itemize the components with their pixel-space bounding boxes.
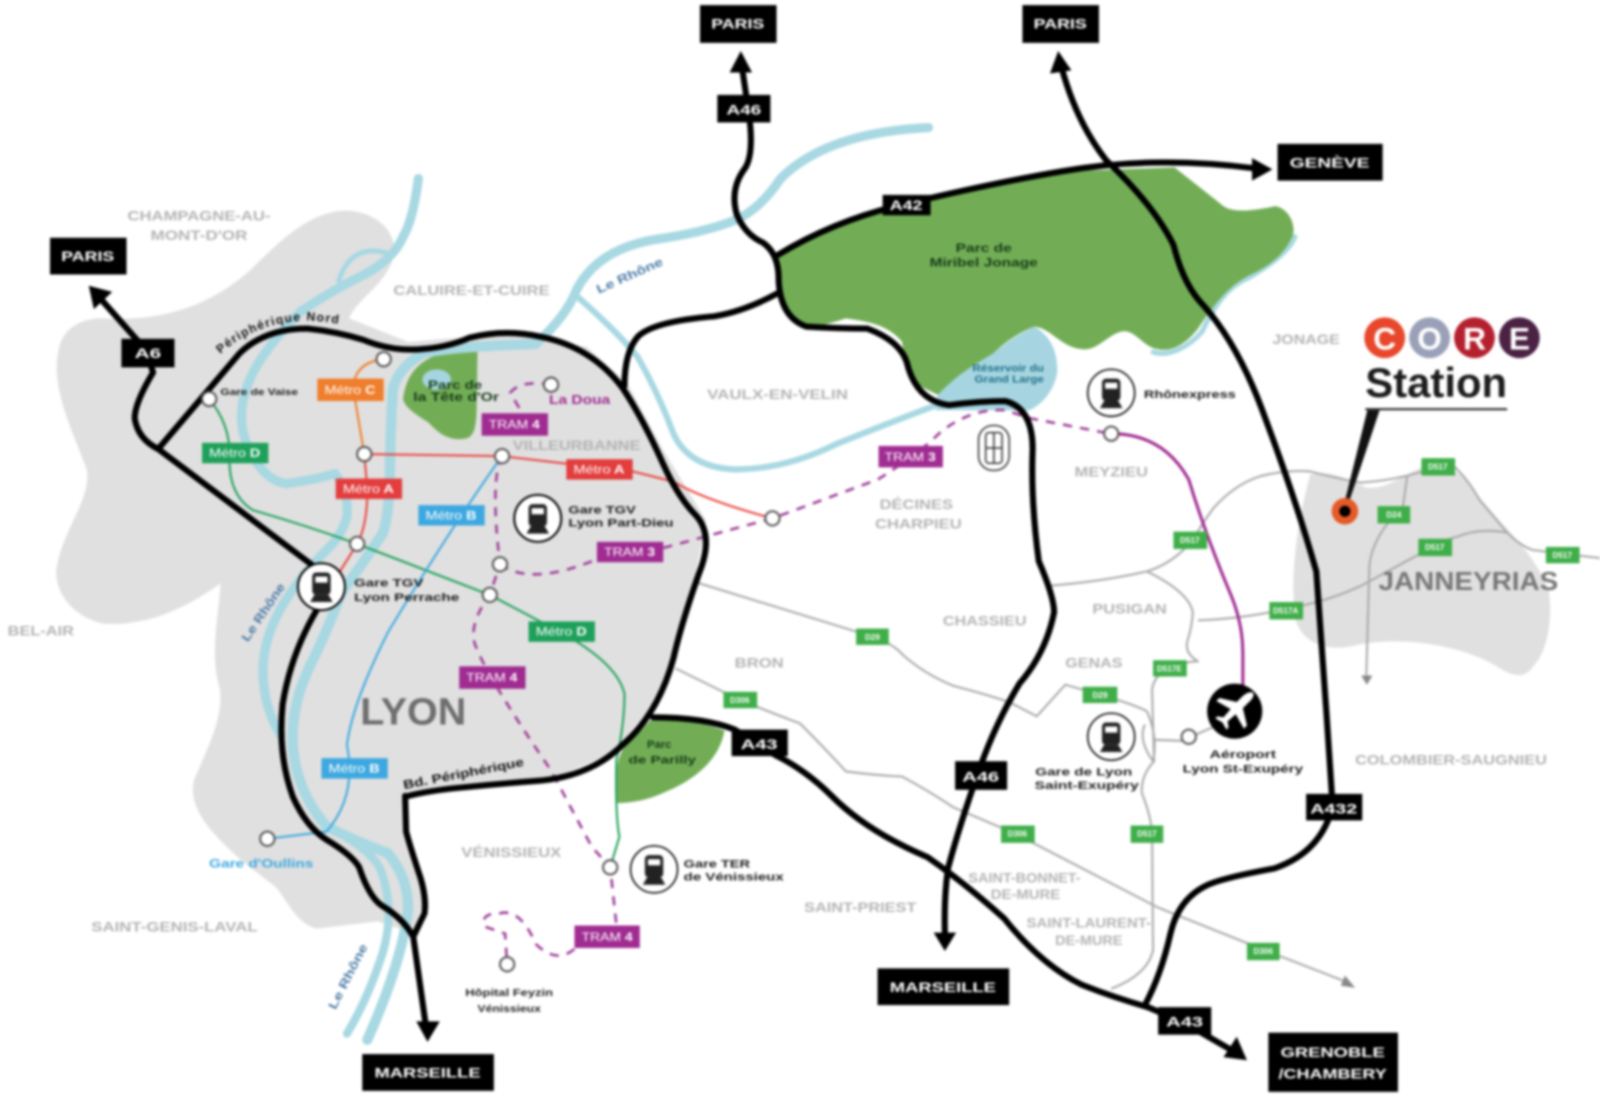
tag D517E: D517E bbox=[1157, 664, 1182, 673]
label: Métro D east bbox=[529, 621, 595, 642]
tag D306 east bbox=[1247, 943, 1280, 960]
road name: Périphérique Nord: Périphérique Nord bbox=[214, 310, 340, 355]
logo badge O: O bbox=[1417, 320, 1442, 356]
label: Métro C bbox=[317, 379, 384, 401]
label: Métro A west bbox=[336, 479, 402, 499]
sign: A46 north: A46 bbox=[727, 102, 761, 118]
stop: Métro A terminus bbox=[765, 511, 780, 526]
secondary roads bbox=[676, 466, 1600, 989]
stop: Métro A and C bbox=[357, 447, 371, 461]
sign: Paris north bbox=[700, 5, 777, 43]
tag D517A bbox=[1269, 602, 1303, 619]
label: Tram 4 south bbox=[574, 926, 640, 948]
stop: Hôpital Feyzin bbox=[500, 957, 514, 971]
label: Métro B south bbox=[321, 758, 388, 779]
sign: A432: A432 bbox=[1310, 801, 1357, 817]
river: upper Rhône bbox=[536, 128, 929, 344]
town: Meyzieu: MEYZIEU bbox=[1074, 465, 1148, 481]
place: Gare TER Vénissieux: de Vénissieux bbox=[684, 872, 785, 884]
town: Colombier-Saugnieu: COLOMBIER-SAUGNIEU bbox=[1355, 752, 1547, 768]
logo badge R bbox=[1454, 317, 1495, 358]
place: Réservoir du Grand Large: Grand Large bbox=[974, 375, 1045, 386]
town: Chassieu: CHASSIEU bbox=[943, 614, 1027, 630]
road D306 bbox=[676, 668, 1351, 984]
sign: A46 south bbox=[955, 761, 1007, 790]
tram 4 line south bbox=[484, 913, 574, 964]
place: Parc de Parilly bbox=[629, 739, 697, 766]
label: Tram 3 east bbox=[879, 446, 943, 467]
logo word Station: Station bbox=[1365, 359, 1507, 406]
town: Charpieu: CHARPIEU bbox=[875, 517, 962, 533]
sign: Marseille centre bbox=[878, 968, 1009, 1005]
place: Parc de Miribel Jonage: Parc de bbox=[956, 242, 1012, 255]
road D29 bbox=[694, 582, 1147, 716]
tag D517A right: D517 bbox=[1425, 543, 1445, 552]
label: Tram 4 north bbox=[482, 413, 548, 436]
motorway number signs bbox=[121, 95, 1362, 1035]
road D517A bbox=[1198, 531, 1507, 620]
sign: Genève bbox=[1278, 144, 1383, 181]
town: De-Mure: DE-MURE bbox=[991, 887, 1060, 903]
tag D29 Genas bbox=[1083, 687, 1117, 703]
place: Parc de la Tête d'Or: la Tête d'Or bbox=[413, 391, 500, 404]
metro B line bbox=[267, 456, 502, 839]
park: Miribel Jonage bbox=[778, 167, 1295, 395]
label: Tram 4 centre: TRAM 4 bbox=[466, 671, 518, 685]
stops bbox=[202, 352, 1196, 971]
tag D517A: D517A bbox=[1273, 606, 1299, 615]
road arrow head south bbox=[1361, 676, 1372, 685]
place: Gare TGV Perrache: Lyon Perrache bbox=[354, 592, 459, 604]
label: Tram 3 east: TRAM 3 bbox=[885, 450, 936, 464]
sign: A43 west: A43 bbox=[741, 737, 778, 753]
label: Tram 3 centre bbox=[597, 542, 663, 562]
metro C line bbox=[353, 359, 384, 454]
tram lines bbox=[473, 383, 1243, 964]
tag D306 Bron bbox=[723, 692, 757, 708]
place: Aéroport Lyon Saint-Exupéry: Lyon St-Exupéry bbox=[1183, 763, 1304, 775]
tram 3 line east bbox=[663, 410, 1110, 548]
tag D517 top: D517 bbox=[1428, 462, 1448, 471]
place: Gare TER Vénissieux: Gare TER bbox=[684, 858, 750, 870]
place: Hôpital Feyzin: Hôpital Feyzin bbox=[465, 988, 553, 999]
tag D29 bbox=[856, 629, 889, 645]
road name: Boulevard Périphérique: Bd. Périphérique bbox=[402, 755, 525, 792]
arrow: to Paris west bbox=[89, 286, 112, 309]
Rhônexpress line bbox=[1111, 434, 1243, 689]
sign: Marseille centre: MARSEILLE bbox=[890, 980, 996, 996]
town: Bel-Air: BEL-AIR bbox=[8, 624, 75, 640]
place: Parc de Parilly: Parc bbox=[647, 739, 671, 751]
label: Tram 3 centre: TRAM 3 bbox=[604, 545, 655, 559]
place: Gare TGV Part-Dieu bbox=[568, 504, 674, 530]
road D517 north bbox=[1050, 466, 1600, 586]
place: Réservoir du Grand Large: Réservoir du bbox=[972, 363, 1044, 374]
A43 motorway bbox=[653, 717, 1230, 1049]
place: Rhônexpress: Rhônexpress bbox=[1144, 389, 1236, 401]
logo underline bbox=[1365, 408, 1507, 410]
place: Gare TGV Part-Dieu: Gare TGV bbox=[568, 504, 636, 516]
tag D517 south bbox=[1131, 826, 1163, 843]
sign: Marseille west bbox=[362, 1054, 494, 1091]
place: Hôpital Feyzin: Vénissieux bbox=[478, 1004, 542, 1015]
stop: Tram 3 and 4 bbox=[493, 557, 507, 571]
green park area bbox=[403, 350, 478, 439]
label: Métro B north: Métro B bbox=[426, 508, 477, 522]
logo badge E bbox=[1499, 317, 1540, 358]
place: Gare de Vaise: Gare de Vaise bbox=[220, 387, 298, 397]
place: Réservoir du Grand Large bbox=[972, 363, 1045, 386]
lake bbox=[422, 369, 451, 390]
arrow heads bbox=[89, 51, 1272, 1060]
river: Saône island bbox=[339, 251, 393, 281]
town: Pusignan: PUSIGAN bbox=[1092, 601, 1167, 617]
town: Vénissieux: VÉNISSIEUX bbox=[461, 844, 562, 861]
road D517 link bbox=[1111, 571, 1198, 989]
river and road names bbox=[214, 255, 665, 1012]
river name: Rhône south: Le Rhône bbox=[326, 941, 371, 1012]
stop: Métro C terminus bbox=[377, 352, 391, 366]
A42 link bbox=[624, 293, 779, 386]
icon: train station Saint-Exupéry bbox=[1088, 713, 1135, 760]
road number tags bbox=[723, 458, 1580, 960]
stop: Gare d'Oullins bbox=[260, 832, 274, 846]
places of interest bbox=[209, 242, 1304, 1015]
sign: A43 east: A43 bbox=[1166, 1015, 1203, 1031]
tag D306 east: D306 bbox=[1254, 947, 1273, 956]
sign: A43 west bbox=[732, 730, 788, 756]
tag D517 Meyzieu: D517 bbox=[1180, 536, 1200, 545]
green park area bbox=[778, 167, 1294, 395]
sign: Grenoble Chambéry: /CHAMBERY bbox=[1279, 1067, 1387, 1083]
metro lines bbox=[209, 359, 772, 867]
place: Parc de la Tête d'Or: Parc de bbox=[428, 379, 483, 392]
river name: Rhône centre: Le Rhône bbox=[239, 580, 288, 644]
label: Métro D west: Métro D bbox=[209, 446, 260, 460]
park: Parilly bbox=[616, 720, 724, 803]
town: Genas: GENAS bbox=[1065, 655, 1122, 671]
ring road south, towards Marseille bbox=[405, 796, 426, 1023]
A432 motorway bbox=[1061, 66, 1333, 1005]
road arrow head south east bbox=[1341, 976, 1355, 988]
town: Caluire-et-Cuire: CALUIRE-ET-CUIRE bbox=[393, 283, 549, 299]
stop: Métro A and D bbox=[350, 537, 364, 551]
tag D24 bbox=[1378, 506, 1410, 523]
sign: Paris east: PARIS bbox=[1034, 17, 1087, 33]
location pin: CORE Station bbox=[1332, 498, 1358, 524]
icon: airport bbox=[1207, 684, 1262, 739]
logo badge C: C bbox=[1373, 320, 1396, 356]
place: Aéroport Lyon Saint-Exupéry bbox=[1183, 749, 1304, 775]
sign: Genève: GENÈVE bbox=[1290, 154, 1369, 171]
arrow: to Marseille west bbox=[416, 1021, 440, 1042]
place: Gare de Lyon Saint-Exupéry: Gare de Lyon bbox=[1035, 767, 1132, 779]
sign: Grenoble Chambéry: GRENOBLE bbox=[1281, 1045, 1385, 1061]
town: Champagne second line: MONT-D'OR bbox=[151, 228, 248, 244]
park: Tête d'Or bbox=[403, 350, 478, 439]
metro A line bbox=[337, 454, 772, 577]
ring road west bbox=[158, 449, 413, 937]
place: Parc de la Tête d'Or bbox=[413, 379, 500, 404]
motorways bbox=[99, 66, 1333, 1049]
tag D306 centre bbox=[1001, 826, 1035, 843]
town: Bron: BRON bbox=[735, 655, 784, 671]
label: Tram 4 centre bbox=[459, 666, 526, 689]
label: Métro D west bbox=[202, 443, 268, 463]
stop: Rhônexpress Meyzieu bbox=[1104, 427, 1118, 441]
tag D517 far right: D517 bbox=[1552, 551, 1572, 560]
place: Parc de Miribel Jonage: Miribel Jonage bbox=[930, 256, 1038, 269]
place: Gare de Lyon Saint-Exupéry: Saint-Exupéry bbox=[1035, 780, 1140, 792]
logo badge E: E bbox=[1509, 320, 1530, 356]
tag D29: D29 bbox=[865, 633, 880, 642]
tag D517 far right bbox=[1546, 547, 1580, 563]
tag D24: D24 bbox=[1386, 510, 1402, 519]
label: Métro B south: Métro B bbox=[329, 761, 380, 775]
sign: Paris west bbox=[50, 238, 127, 274]
tram 4 line centre bbox=[473, 456, 617, 934]
A46 motorway bbox=[734, 66, 1054, 934]
town: Jonage: JONAGE bbox=[1272, 332, 1340, 348]
river name: Rhône north: Le Rhône bbox=[594, 255, 665, 297]
sign: Paris north: PARIS bbox=[711, 17, 764, 33]
arrow: to Paris north bbox=[730, 51, 752, 72]
tag D517 south: D517 bbox=[1137, 830, 1157, 839]
tram 4 line north bbox=[510, 383, 551, 413]
logo badge O bbox=[1409, 317, 1450, 358]
place: Hôpital Feyzin bbox=[465, 988, 553, 1015]
stop: Saint-Exupéry bbox=[1182, 730, 1196, 744]
A42 motorway bbox=[778, 162, 1255, 255]
place: Gare de Lyon Saint-Exupéry bbox=[1035, 767, 1140, 792]
callout pointer to the station bbox=[1344, 410, 1380, 505]
tag D306 centre: D306 bbox=[1008, 830, 1028, 839]
place: Parc de Parilly: de Parilly bbox=[629, 754, 697, 766]
label: Métro A east bbox=[566, 459, 633, 480]
arrow: to Paris east bbox=[1050, 51, 1071, 73]
icon: train station Part-Dieu bbox=[514, 495, 561, 542]
sign: A42 bbox=[883, 195, 931, 215]
logo badge R: R bbox=[1463, 320, 1486, 356]
ring road north and east bbox=[158, 329, 706, 796]
town: Champagne-au-Mont-d'Or: CHAMPAGNE-AU- bbox=[128, 208, 271, 224]
metro and tram labels bbox=[202, 379, 943, 948]
tag D306 Bron: D306 bbox=[730, 696, 750, 705]
place: La Doua: La Doua bbox=[549, 392, 611, 407]
sign: Paris east bbox=[1022, 5, 1099, 43]
gray urban area: Janneyrias bbox=[1293, 467, 1550, 675]
sign: A432 bbox=[1306, 794, 1362, 820]
label: Métro C: Métro C bbox=[324, 383, 376, 397]
label: Métro A west: Métro A bbox=[343, 482, 394, 496]
place: Gare TGV Perrache bbox=[354, 578, 459, 604]
arrow: to Genève bbox=[1252, 158, 1272, 181]
road to the south of Janneyrias bbox=[1366, 477, 1407, 676]
sign: A43 east bbox=[1158, 1007, 1211, 1035]
label: Métro B north bbox=[418, 505, 485, 526]
airport road loop bbox=[1143, 711, 1214, 761]
town: Saint-Laurent: SAINT-LAURENT- bbox=[1027, 916, 1151, 932]
town names bbox=[8, 208, 1558, 949]
tag D517E bbox=[1153, 660, 1187, 677]
stop: Villeurbanne bbox=[495, 449, 509, 463]
icon: train station Perrache bbox=[298, 563, 345, 610]
label: Tram 4 south: TRAM 4 bbox=[582, 930, 633, 944]
sign: A6 bbox=[121, 339, 174, 367]
place: Gare TGV Part-Dieu: Lyon Part-Dieu bbox=[568, 518, 674, 530]
town: Saint-Priest: SAINT-PRIEST bbox=[804, 900, 917, 916]
tag D517 top bbox=[1421, 458, 1455, 476]
town: Saint-Genis-Laval: SAINT-GENIS-LAVAL bbox=[91, 920, 258, 936]
icon: train station Rhônexpress bbox=[1088, 369, 1135, 416]
label: Métro D east: Métro D bbox=[536, 625, 587, 639]
place: Parc de Miribel Jonage bbox=[930, 242, 1038, 269]
place: Gare TGV Perrache: Gare TGV bbox=[354, 578, 424, 590]
tag D517 Meyzieu bbox=[1173, 532, 1207, 549]
place: Gare d'Oullins: Gare d'Oullins bbox=[209, 857, 314, 870]
sign: A42: A42 bbox=[890, 198, 923, 214]
logo badge C bbox=[1364, 317, 1405, 358]
river: Rhône through Lyon bbox=[293, 344, 536, 1040]
town: Lyon: LYON bbox=[360, 690, 466, 732]
logo: CORE Station bbox=[1364, 317, 1540, 410]
town: De-Mure second: DE-MURE bbox=[1055, 933, 1122, 949]
stop: La Doua bbox=[544, 378, 558, 392]
river: lower Rhône arm bbox=[327, 827, 389, 1034]
label: Métro A east: Métro A bbox=[573, 462, 625, 476]
place: Gare TER Vénissieux bbox=[684, 858, 785, 884]
place: Aéroport Lyon Saint-Exupéry: Aéroport bbox=[1210, 749, 1276, 761]
tram 3 line centre bbox=[500, 559, 597, 574]
sign: A46 north bbox=[717, 95, 770, 122]
arrow: to Marseille centre bbox=[934, 933, 956, 951]
rivers bbox=[241, 128, 934, 1040]
sign: Marseille west: MARSEILLE bbox=[374, 1066, 481, 1082]
stop: Métro D and Tram 4 bbox=[483, 588, 497, 602]
sign: A6: A6 bbox=[135, 346, 161, 362]
reservoir: Grand Large bbox=[936, 327, 1057, 410]
A6 motorway bbox=[99, 297, 158, 449]
tag D29 Genas: D29 bbox=[1093, 691, 1108, 700]
sign: A46 south: A46 bbox=[962, 770, 999, 786]
river: Rhône canal bbox=[577, 296, 934, 469]
stop: Gare de Vaise bbox=[202, 392, 216, 406]
stop: Vénissieux bbox=[603, 860, 617, 874]
icon: tram at Décines bbox=[979, 426, 1009, 470]
sign: Paris west: PARIS bbox=[61, 249, 114, 265]
town: Saint-Bonnet: SAINT-BONNET- bbox=[968, 871, 1081, 887]
town: Décines: DÉCINES bbox=[880, 496, 953, 513]
gray urban area: Lyon bbox=[56, 211, 706, 934]
metro D line bbox=[209, 399, 624, 867]
sign: Grenoble Chambéry bbox=[1268, 1033, 1398, 1092]
label: Tram 4 north: TRAM 4 bbox=[489, 418, 540, 432]
lake edge of the park bbox=[1153, 237, 1295, 353]
town: Janneyrias: JANNEYRIAS bbox=[1379, 568, 1558, 596]
town: Vaulx-en-Velin: VAULX-EN-VELIN bbox=[707, 387, 848, 403]
river: Saône bbox=[241, 179, 418, 735]
arrow: to Grenoble bbox=[1223, 1037, 1247, 1060]
tag D517A right bbox=[1418, 539, 1452, 556]
town: Villeurbanne: VILLEURBANNE bbox=[513, 438, 640, 454]
icon: train station Vénissieux bbox=[631, 846, 678, 893]
